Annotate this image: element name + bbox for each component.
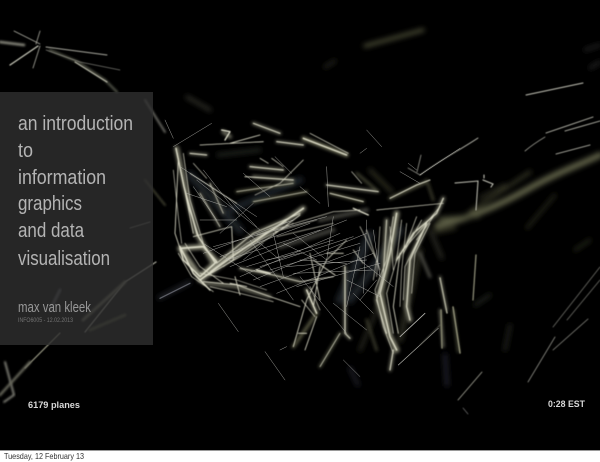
title text: graphics	[18, 193, 82, 215]
title text	[18, 113, 133, 270]
upper-left flight trails	[0, 31, 120, 92]
footer date: Tuesday, 12 February 13	[4, 451, 84, 461]
author name: max van kleek	[18, 299, 91, 316]
clock time: 0:28 EST	[548, 399, 585, 410]
flight network soft glow	[177, 123, 458, 370]
left streaks behind the panel	[0, 100, 165, 402]
title text: and data	[18, 220, 85, 242]
flight network bright trails	[173, 123, 443, 370]
title text: an introduction	[18, 113, 133, 135]
olive background streaks	[187, 30, 600, 350]
flight network thin tracks	[160, 120, 460, 380]
title text: information	[18, 167, 106, 189]
upper-right flight trails	[408, 83, 600, 210]
panel background	[0, 92, 153, 345]
course code and date: INFO6005 - 12.02.2013	[18, 318, 74, 324]
title text: to	[18, 140, 33, 162]
title text: visualisation	[18, 248, 110, 270]
blue-grey haze over the network	[159, 175, 447, 385]
plane count: 6179 planes	[28, 400, 80, 411]
title panel	[0, 92, 153, 345]
lower-right flight trails	[420, 255, 600, 414]
footer rule	[0, 450, 600, 451]
